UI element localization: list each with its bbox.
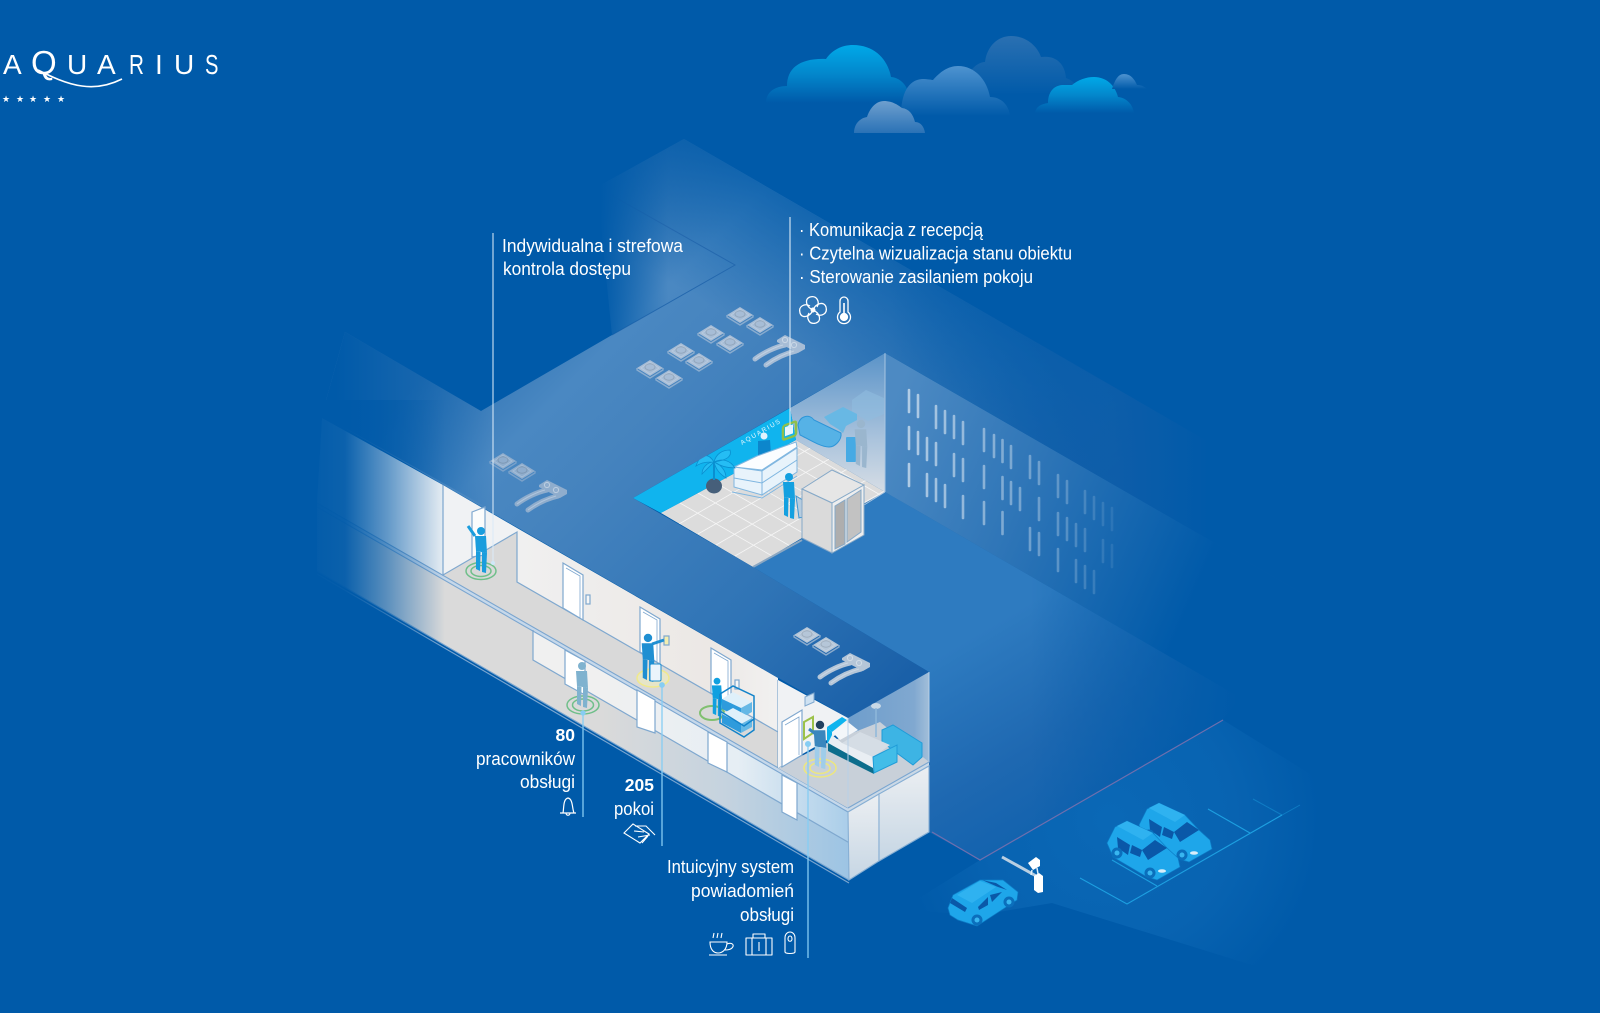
hotel room [778, 672, 929, 812]
roof band shading [597, 139, 1300, 592]
stat: staff: obsługi [520, 771, 575, 792]
ceiling vents right group [794, 627, 839, 655]
callout line room panel [788, 217, 792, 429]
ceiling vents left group [490, 453, 535, 481]
callout line access control [491, 233, 495, 565]
reception desk [732, 442, 797, 498]
icon: door hanger [785, 932, 795, 954]
roof right fade [890, 257, 1300, 592]
elevator [802, 470, 864, 553]
lobby [633, 353, 893, 567]
air conditioning unit upper [755, 335, 805, 365]
logo: R [129, 50, 144, 81]
icon: suitcase [746, 934, 772, 955]
barrier and camera [1002, 857, 1043, 893]
parked car back [1139, 803, 1212, 862]
callout line rooms [660, 683, 664, 846]
worker on lower floor [567, 662, 599, 714]
callout text access control [502, 235, 684, 279]
guest at door with suitcase [637, 634, 669, 687]
housekeeper with cart [700, 678, 754, 737]
parked car front [1107, 821, 1180, 880]
icon: thermometer [838, 297, 850, 324]
facade with windows [885, 353, 1300, 732]
ceiling vents upper group [637, 307, 773, 388]
end panels [848, 766, 929, 880]
callout line staff [581, 711, 585, 817]
air conditioning unit left [517, 480, 567, 510]
courtyard right fade [1030, 575, 1245, 832]
stat: staff: 80 [556, 725, 575, 745]
callout line notification [806, 742, 810, 958]
stat: rooms: 205 [625, 775, 654, 795]
stat: staff [476, 725, 576, 792]
roof left fades [322, 125, 690, 512]
receptionist [758, 432, 771, 458]
stat: rooms [614, 775, 654, 819]
callout text notification: powiadomień [691, 880, 794, 901]
callout text notification [667, 856, 794, 925]
parking area [900, 720, 1320, 980]
guest near lounge [846, 420, 867, 468]
check-in kiosk [783, 421, 796, 440]
stat: staff: pracowników [476, 748, 576, 769]
icon: bell [560, 798, 576, 815]
courtyard ground [753, 492, 1240, 860]
callout text room panel: · Czytelna wizualizacja stanu obiektu [799, 242, 1072, 264]
car approaching barrier [948, 880, 1018, 926]
corridor section [317, 418, 879, 883]
lobby sign: AQUARIUS [740, 418, 783, 447]
callout text access control: Indywidualna i strefowa [502, 235, 684, 256]
callout text notification: Intuicyjny system [667, 856, 794, 877]
icon: fan [800, 297, 826, 323]
air conditioning unit right [820, 653, 870, 683]
callout text room panel: · Sterowanie zasilaniem pokoju [799, 266, 1033, 287]
logo [2, 44, 218, 105]
callout text notification: obsługi [740, 904, 794, 925]
road lines [932, 720, 1300, 904]
lobby furniture [798, 390, 884, 447]
stat: rooms: pokoi [614, 798, 654, 819]
access ring and worker left [466, 526, 496, 580]
upper wing roof [322, 139, 1300, 718]
corridor left fade [295, 400, 447, 660]
callout text access control: kontrola dostępu [503, 258, 631, 279]
icon: coffee cup [709, 933, 733, 955]
logo: S [205, 50, 218, 81]
clouds [766, 36, 1147, 133]
palm plant [696, 450, 735, 494]
logo: A Q UAIU [3, 44, 194, 81]
callout text room panel: · Komunikacja z recepcją [799, 219, 984, 240]
roof edge lines [597, 187, 735, 335]
icon: key card in hand [624, 824, 655, 843]
logo: ★★★★★ [2, 95, 65, 105]
doors [472, 507, 802, 820]
guest at room keypad [804, 721, 836, 777]
callout text room panel [799, 219, 1072, 287]
guest with suitcase in lobby [783, 473, 808, 519]
